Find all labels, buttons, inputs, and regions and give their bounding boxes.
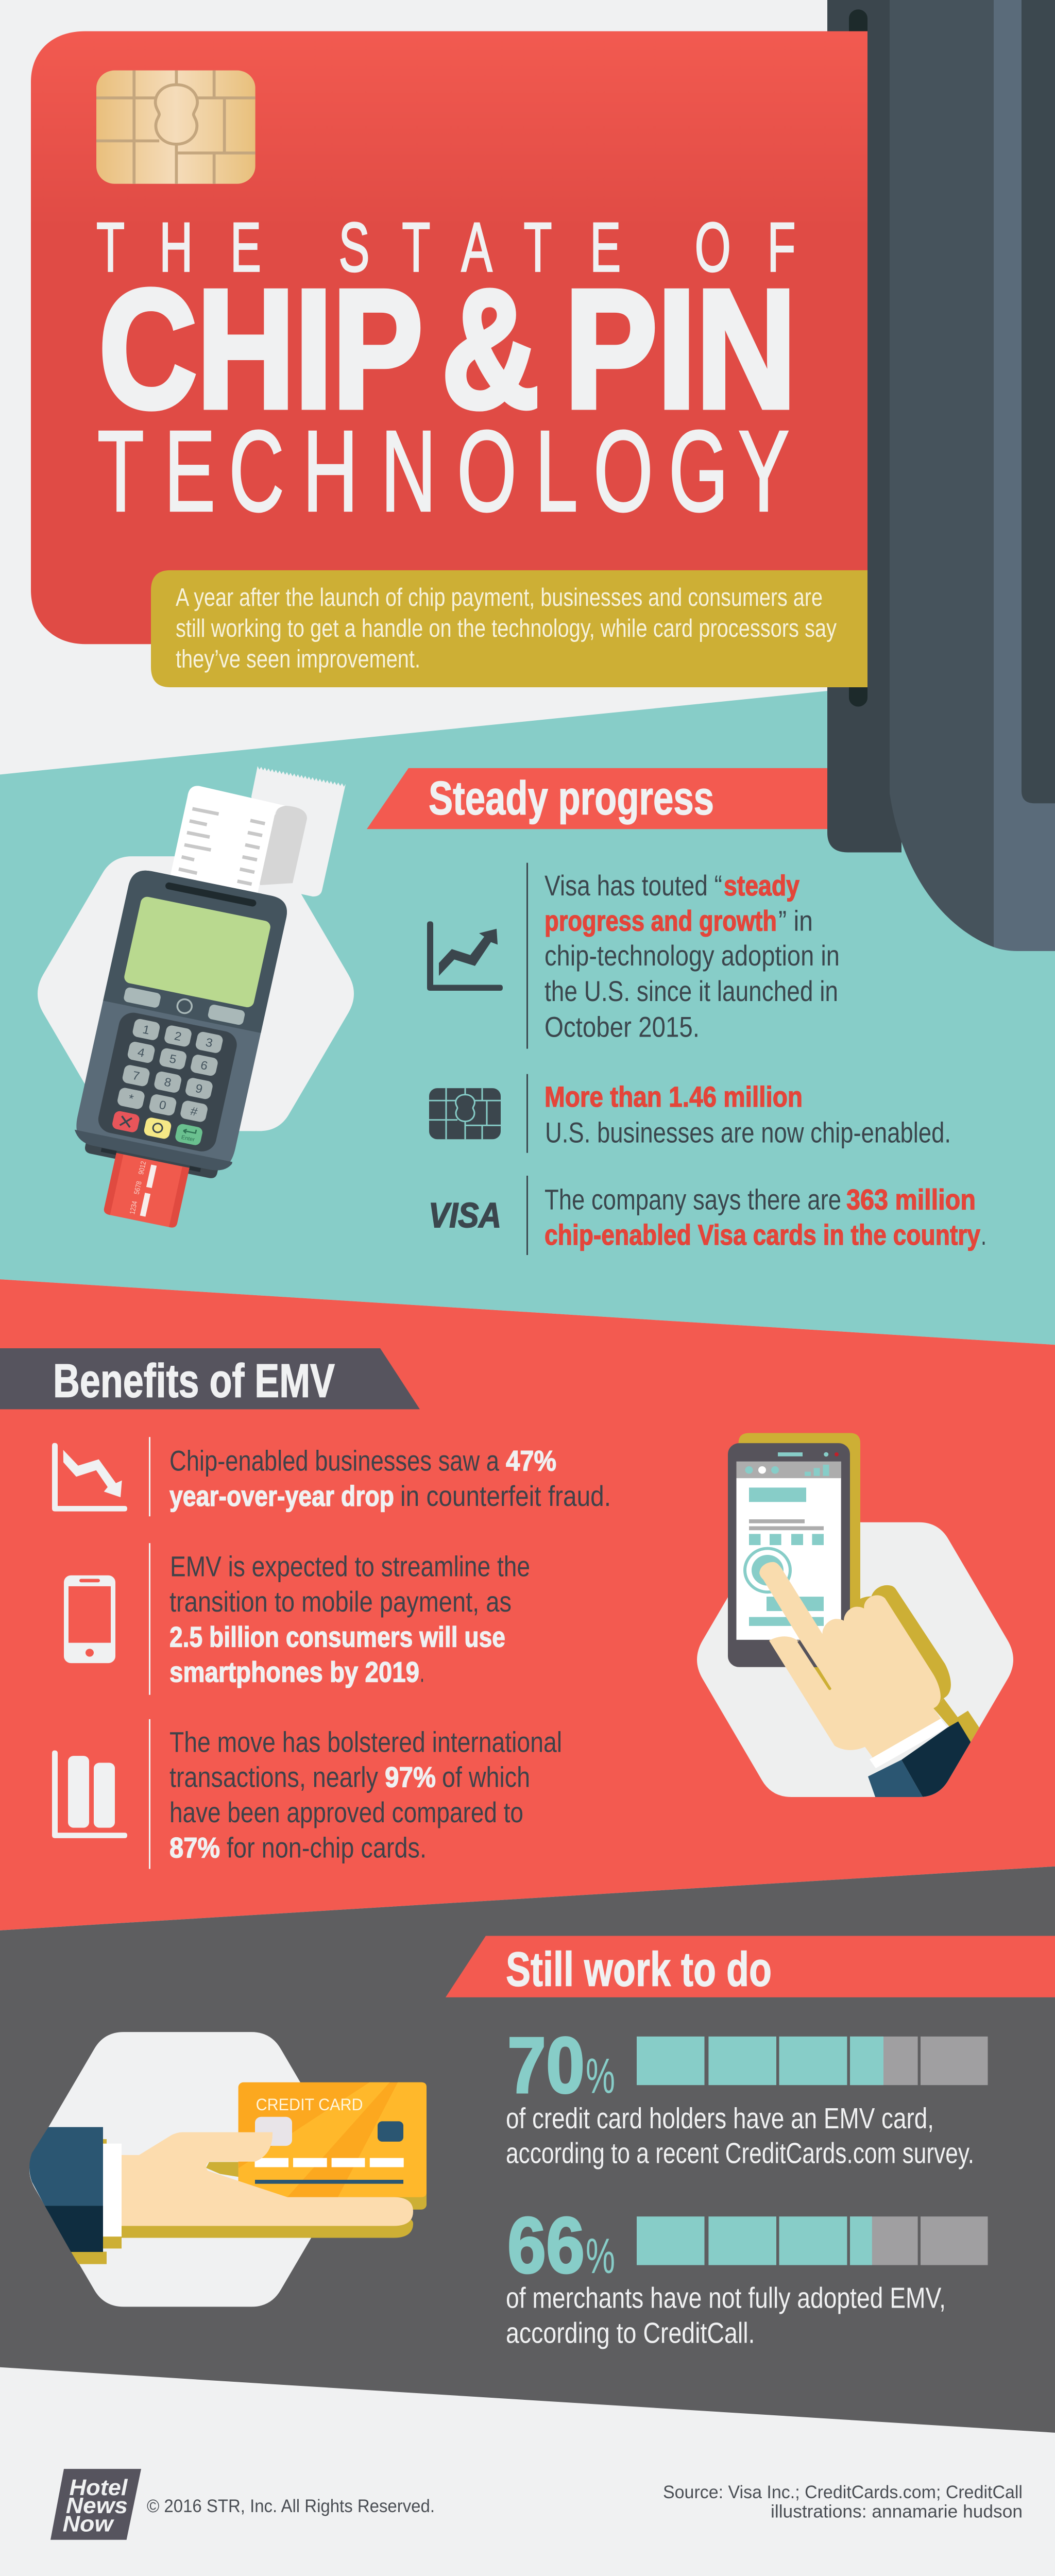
benefit: international transactions: have been approved compared to: [169, 1797, 523, 1829]
pointing hand: [759, 1562, 941, 1759]
icon: rising chart: [427, 921, 503, 991]
stat block: steady progress and growth: [427, 863, 840, 1049]
stat: 66 percent: %: [586, 2228, 615, 2284]
panel: red credit card header: [31, 31, 867, 687]
footer logo: Hotel News Now: [50, 2469, 141, 2540]
icon: bar chart: [52, 1750, 127, 1838]
benefit: international transactions: transactions, nearly: [169, 1761, 378, 1793]
intro callout: A year after the launch of chip payment, businesses and consumers are: [176, 583, 823, 612]
red card in reader: 1234: [128, 1200, 139, 1215]
card reader machine: [827, 0, 1055, 951]
footer logo: Hotel News Now: News: [66, 2494, 128, 2518]
keypad: #: [189, 1105, 199, 1118]
footer logo: Hotel News Now: Hotel: [69, 2476, 128, 2500]
red card in reader: 5678: [132, 1180, 143, 1195]
stat block: steady progress and growth: the U.S. since it launched in: [544, 975, 838, 1008]
benefit: international transactions: 97%: [385, 1761, 436, 1793]
terminal screen: [123, 895, 271, 1008]
stat block: steady progress and growth: steady: [724, 870, 799, 902]
stat block: steady progress and growth: October 2015.: [544, 1011, 700, 1043]
keypad: 6: [199, 1058, 209, 1073]
red card in reader: 9012: [137, 1161, 147, 1175]
icon: gold EMV chip: [96, 71, 256, 184]
keypad: 0: [158, 1098, 167, 1112]
icon: chip: [429, 1088, 501, 1139]
stat: 66 percent: 66: [507, 2201, 585, 2290]
intro callout: [151, 570, 867, 687]
stat: 70 percent: %: [586, 2048, 615, 2104]
keypad: 8: [163, 1075, 173, 1089]
phone: [728, 1433, 860, 1667]
keypad: 3: [205, 1036, 214, 1049]
keypad: 1: [142, 1023, 151, 1037]
panel: benefits of EMV background: [0, 1279, 1055, 1930]
illustration: hand tapping smartphone: [697, 1433, 1013, 1805]
footer sources: [663, 2482, 1023, 2521]
footer sources: Source: Visa Inc.; CreditCards.com; CreditCall: [663, 2482, 1023, 2502]
credit card: [239, 2082, 427, 2210]
benefit: counterfeit fraud drop: [52, 1437, 611, 1516]
benefit: international transactions: The move has bolstered international: [169, 1726, 562, 1758]
benefit: mobile payment: .: [420, 1656, 424, 1688]
title: CHIP: [99, 255, 423, 443]
stat block: 363 million cards: 363 million: [846, 1183, 976, 1216]
keypad: 2: [173, 1029, 183, 1043]
benefit: mobile payment: EMV is expected to streamline the: [170, 1551, 530, 1583]
stat block: steady progress and growth: progress and growth: [544, 905, 777, 937]
stat: 66 percent: of merchants have not fully adopted EMV,: [506, 2282, 946, 2314]
sleeve and cuff: [29, 2127, 122, 2264]
stat block: 1.46 million businesses: U.S. businesses are now chip-enabled.: [545, 1117, 951, 1149]
icon: smartphone: [64, 1575, 115, 1663]
benefit: mobile payment: 2.5 billion consumers will use: [169, 1621, 505, 1653]
keypad: 4: [137, 1045, 146, 1060]
benefit: international transactions: for non-chip cards.: [227, 1832, 427, 1864]
title: TECHNOLOGY: [97, 407, 789, 536]
keypad: *: [127, 1092, 135, 1106]
icon: falling chart: [52, 1443, 127, 1512]
illustration: payment terminal: [38, 766, 354, 1236]
stat: 70 percent: [506, 2021, 988, 2170]
keypad: [96, 1010, 240, 1154]
terminal foot: [84, 1141, 218, 1179]
receipt paper roll: [167, 766, 346, 906]
stat block: steady progress and growth: ” in: [778, 905, 813, 937]
benefit: international transactions: [52, 1719, 562, 1869]
benefit: mobile payment: smartphones by 2019: [169, 1656, 419, 1688]
open hand: [122, 2132, 413, 2238]
keypad: 7: [131, 1069, 141, 1083]
shirt cuff and sleeve: [868, 1719, 971, 1797]
stat block: 1.46 million businesses: [429, 1074, 951, 1153]
hand shadow: [933, 1698, 979, 1748]
stat block: 363 million cards: The company says there are: [544, 1183, 841, 1216]
stat block: 363 million cards: .: [981, 1219, 986, 1251]
footer copyright: © 2016 STR, Inc. All Rights Reserved.: [147, 2495, 435, 2516]
stat: 66 percent: [506, 2201, 988, 2349]
icon: visa logo: VISA: [429, 1196, 501, 1235]
title: THE STATE OF: [96, 209, 796, 286]
heading: steady progress: Steady progress: [429, 772, 714, 824]
title: PIN: [565, 255, 796, 443]
benefit: mobile payment: transition to mobile payment, as: [169, 1586, 512, 1618]
footer logo: Hotel News Now: Now: [63, 2512, 114, 2536]
stat block: 363 million cards: [429, 1176, 986, 1255]
heading: still work to do: [446, 1936, 1055, 1997]
heading: still work to do: Still work to do: [506, 1943, 772, 1996]
progress bar 66: [637, 2216, 988, 2265]
intro callout: they’ve seen improvement.: [176, 645, 420, 673]
title: [96, 209, 796, 536]
red card in reader: [103, 1153, 190, 1229]
stat block: 1.46 million businesses: More than 1.46 million: [544, 1081, 803, 1113]
stat: 66 percent: according to CreditCall.: [506, 2317, 755, 2349]
keypad: 9: [194, 1081, 204, 1096]
benefit: international transactions: of which: [442, 1761, 530, 1793]
intro callout: still working to get a handle on the technology, while card processors say: [176, 614, 837, 642]
benefit: counterfeit fraud drop: in counterfeit fraud.: [400, 1480, 611, 1513]
terminal body: [72, 867, 290, 1174]
benefit: international transactions: 87%: [169, 1832, 220, 1864]
credit card: CREDIT CARD: [256, 2096, 363, 2114]
heading: benefits of EMV: Benefits of EMV: [53, 1354, 335, 1407]
title: &: [441, 255, 539, 443]
benefit: counterfeit fraud drop: Chip-enabled businesses saw a: [169, 1445, 499, 1477]
stat block: steady progress and growth: chip-technology adoption in: [544, 940, 840, 972]
progress bar 70: [637, 2037, 988, 2085]
keypad: 5: [168, 1052, 178, 1066]
stat block: steady progress and growth: Visa has touted “: [544, 870, 722, 902]
stat: 70 percent: 70: [507, 2021, 585, 2110]
benefit: counterfeit fraud drop: year-over-year drop: [169, 1480, 394, 1513]
benefit: counterfeit fraud drop: 47%: [506, 1445, 556, 1477]
benefit: mobile payment: [64, 1543, 530, 1695]
panel: steady progress background: [0, 668, 1055, 1345]
stat: 70 percent: of credit card holders have an EMV card,: [506, 2103, 934, 2135]
illustration: hand holding credit card: [29, 2032, 427, 2307]
keypad: Enter: [181, 1134, 195, 1143]
footer sources: illustrations: annamarie hudson: [771, 2501, 1023, 2521]
panel: still work to do background: [0, 1867, 1055, 2433]
